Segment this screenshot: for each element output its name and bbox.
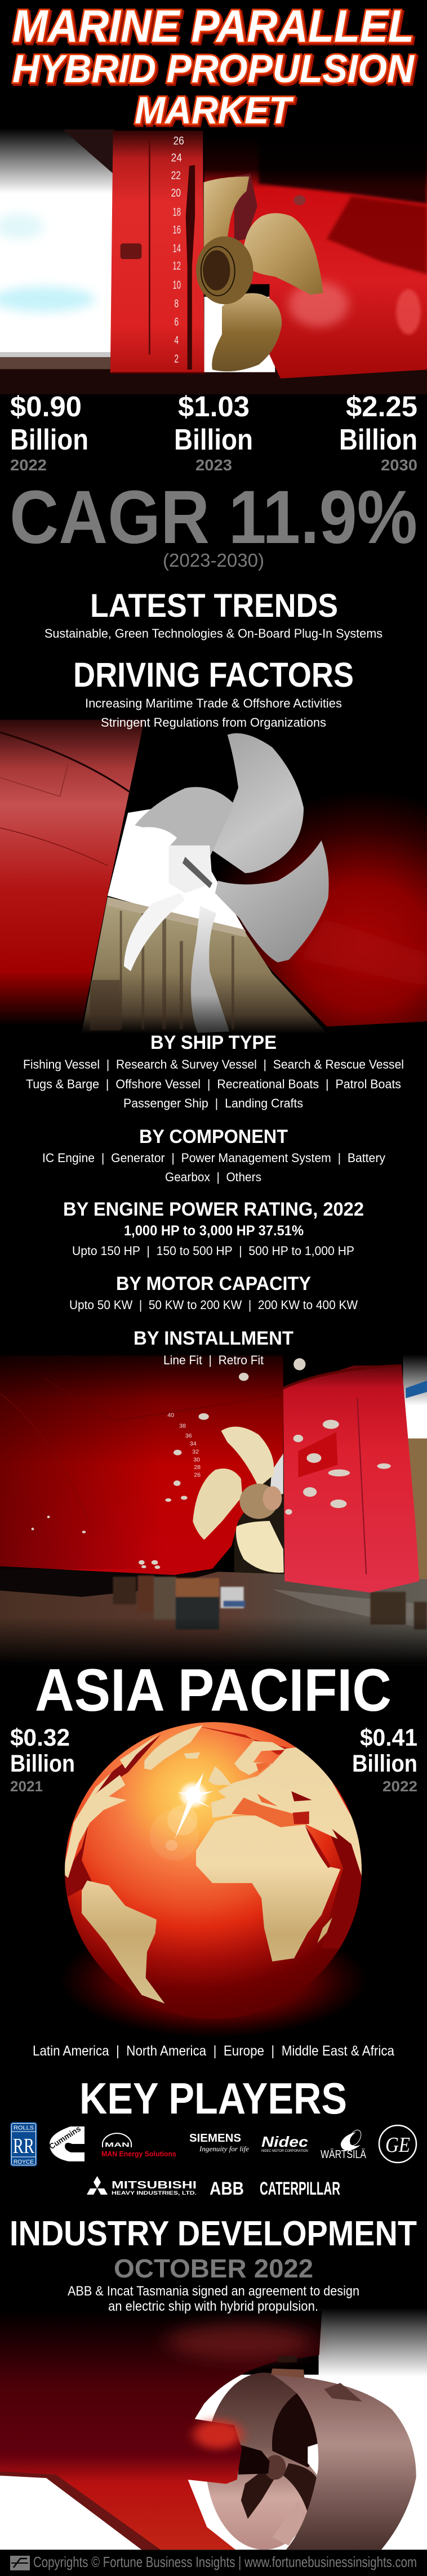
logo: MAN Energy Solutions: MAN <box>105 2142 130 2148</box>
rudder draft marks: 24 <box>171 151 182 164</box>
October 2022 development text: OCTOBER 2022 <box>114 2254 313 2283</box>
title: HYBRID PROPULSION <box>12 47 415 91</box>
stat: Asia Pacific 2021: 2021 <box>10 1778 43 1795</box>
logo: Siemens <box>189 2132 249 2153</box>
by component <box>42 1126 385 1184</box>
stat: Asia Pacific 2022: 2022 <box>382 1778 417 1795</box>
propeller blades <box>212 733 304 873</box>
hull draft marks: 28 <box>194 1465 201 1471</box>
by component: Gearbox | Others <box>165 1170 261 1184</box>
by installment: BY INSTALLMENT <box>134 1328 293 1349</box>
logo: Cummins: Cummins <box>47 2124 82 2151</box>
logo: Nidec: NIDEC MOTOR CORPORATION <box>261 2150 308 2153</box>
by ship type: Passenger Ship | Landing Crafts <box>123 1096 303 1110</box>
by motor capacity: Upto 50 KW | 50 KW to 200 KW | 200 KW to 400 KW <box>69 1298 358 1312</box>
logo: GE <box>379 2125 416 2163</box>
logo: Mitsubishi Heavy Industries <box>87 2176 197 2196</box>
hull draft marks: 36 <box>185 1433 192 1439</box>
stat: Asia Pacific 2021 <box>10 1724 75 1795</box>
CAGR callout: (2023-2030) <box>163 550 264 571</box>
cream propeller blades <box>221 1427 274 1488</box>
heading: key players: KEY PLAYERS <box>79 2074 347 2123</box>
driving factors: Stringent Regulations from Organizations <box>101 715 326 729</box>
dock floor <box>0 1567 427 1665</box>
stat: 2030 market size <box>339 390 417 474</box>
hull and strut <box>0 2311 322 2550</box>
stat: 2023 market size: 2023 <box>195 456 232 474</box>
stat: 2022 market size: $0.90 <box>10 390 82 422</box>
rudder draft marks: 22 <box>171 169 181 182</box>
driving factors <box>73 656 354 729</box>
rudder draft marks: 10 <box>172 278 181 291</box>
logo: Rolls-Royce: RR <box>13 2134 34 2158</box>
rudder draft marks: 8 <box>174 297 179 310</box>
logo: Siemens: Ingenuity for life <box>199 2145 249 2153</box>
stat: 2022 market size <box>10 390 88 474</box>
title: HYBRID PROPULSION <box>14 48 416 92</box>
by motor capacity <box>69 1273 358 1312</box>
logo: Mitsubishi Heavy Industries: MITSUBISHI <box>112 2179 197 2191</box>
stat: Asia Pacific 2022: $0.41 <box>360 1724 417 1751</box>
logo: Cummins <box>47 2124 84 2161</box>
rudder draft marks: 26 <box>173 134 184 147</box>
rudder draft marks: 12 <box>172 259 181 272</box>
hero image: red rudder and bronze propeller <box>0 128 427 394</box>
by ship type: Fishing Vessel | Research & Survey Vessel | Search & Rescue Vessel <box>23 1057 404 1071</box>
stat: 2022 market size: Billion <box>10 424 88 456</box>
by component: IC Engine | Generator | Power Management System | Battery <box>42 1151 385 1165</box>
logo: Nidec: Nidec <box>261 2133 309 2150</box>
by engine power rating: Upto 150 HP | 150 to 500 HP | 500 HP to 1,000 HP <box>72 1244 354 1258</box>
heading: Asia Pacific: ASIA PACIFIC <box>35 1656 392 1724</box>
image: ship hull, rudder and cream propeller on blocks <box>0 1354 427 1665</box>
stat: Asia Pacific 2021: $0.32 <box>10 1724 70 1751</box>
hull draft marks: 30 <box>193 1457 200 1463</box>
rudder draft marks <box>171 134 184 366</box>
stat: 2023 market size: Billion <box>174 424 253 456</box>
stat: 2030 market size: $2.25 <box>346 390 417 422</box>
driving factors: DRIVING FACTORS <box>73 656 354 694</box>
stat: Asia Pacific 2022: Billion <box>352 1750 417 1777</box>
rudder draft marks: 16 <box>172 223 181 236</box>
latest trends <box>45 588 382 640</box>
by ship type <box>23 1032 404 1110</box>
title: MARKET <box>136 91 296 134</box>
rudder draft marks: 6 <box>174 315 179 328</box>
logo: Rolls-Royce: ROLLS <box>14 2125 34 2132</box>
duct outer band <box>272 2375 416 2550</box>
stat: 2030 market size: 2030 <box>381 456 417 474</box>
logo: Siemens: SIEMENS <box>189 2132 241 2145</box>
image: ducted propeller on red hull <box>0 2308 427 2550</box>
logo: Wartsila: WÄRTSILÄ <box>321 2148 367 2161</box>
propeller blades <box>204 176 249 248</box>
logo: MAN Energy Solutions <box>101 2133 176 2158</box>
stat: 2022 market size: 2022 <box>10 456 47 474</box>
driving factors: Increasing Maritime Trade & Offshore Activities <box>85 696 342 710</box>
by engine power rating: 1,000 HP to 3,000 HP 37.51% <box>124 1223 304 1239</box>
hull draft marks: 38 <box>179 1423 186 1429</box>
support blocks <box>113 1576 427 1630</box>
sun flare <box>150 1772 214 1861</box>
globe illustration <box>60 1722 368 2037</box>
stat: 2023 market size <box>174 390 253 474</box>
title <box>12 1 416 134</box>
other regions list: Latin America | North America | Europe | Middle East & Africa <box>33 2043 394 2059</box>
hull draft marks: 40 <box>167 1413 174 1419</box>
logo: Wartsila <box>321 2128 367 2161</box>
hull draft marks: 32 <box>192 1449 199 1455</box>
October 2022 development text <box>68 2254 359 2314</box>
rudder draft marks: 20 <box>171 186 181 199</box>
October 2022 development text: ABB & Incat Tasmania signed an agreement to design <box>68 2284 359 2299</box>
October 2022 development text: an electric ship with hybrid propulsion. <box>108 2299 318 2314</box>
stat: Asia Pacific 2021: Billion <box>10 1750 75 1777</box>
logo: Rolls-Royce: ROYCE <box>14 2159 34 2165</box>
by ship type: BY SHIP TYPE <box>150 1032 277 1053</box>
hull draft marks: 26 <box>194 1472 201 1478</box>
hull draft marks: 34 <box>190 1441 197 1447</box>
shaft collar <box>278 2356 297 2363</box>
stat: 2023 market size: $1.03 <box>178 390 250 422</box>
by ship type: Tugs & Barge | Offshore Vessel | Recreational Boats | Patrol Boats <box>26 1077 401 1091</box>
rudder draft marks: 18 <box>172 206 181 219</box>
by component: BY COMPONENT <box>139 1126 288 1147</box>
by installment: Line Fit | Retro Fit <box>163 1353 264 1367</box>
by installment <box>134 1328 293 1367</box>
logo: MAN Energy Solutions: MAN Energy Solutions <box>101 2150 176 2158</box>
logo: Mitsubishi Heavy Industries: HEAVY INDUSTRIES, LTD. <box>112 2190 197 2196</box>
logo: Caterpillar: CATERPILLAR <box>260 2178 340 2199</box>
by motor capacity: BY MOTOR CAPACITY <box>116 1273 311 1294</box>
title: MARKET <box>135 89 294 132</box>
by engine power rating <box>63 1199 364 1258</box>
rudder draft marks: 4 <box>174 333 179 347</box>
rudder draft marks: 2 <box>174 353 179 366</box>
rivet plugs <box>32 1358 391 1569</box>
hull draft marks <box>167 1413 201 1478</box>
logo: Rolls-Royce <box>10 2122 37 2166</box>
latest trends: LATEST TRENDS <box>90 588 338 624</box>
image: white propeller in dry dock <box>0 720 427 1033</box>
duct back wall and propeller <box>206 2373 323 2550</box>
latest trends: Sustainable, Green Technologies & On-Board Plug-In Systems <box>45 626 382 640</box>
rudder draft marks: 14 <box>172 242 181 255</box>
stat: 2030 market size: Billion <box>339 424 417 456</box>
stat: Asia Pacific 2022 <box>352 1724 417 1795</box>
by engine power rating: BY ENGINE POWER RATING, 2022 <box>63 1199 364 1220</box>
logo: GE: GE <box>385 2133 410 2157</box>
logo: ABB: ABB <box>210 2178 244 2199</box>
